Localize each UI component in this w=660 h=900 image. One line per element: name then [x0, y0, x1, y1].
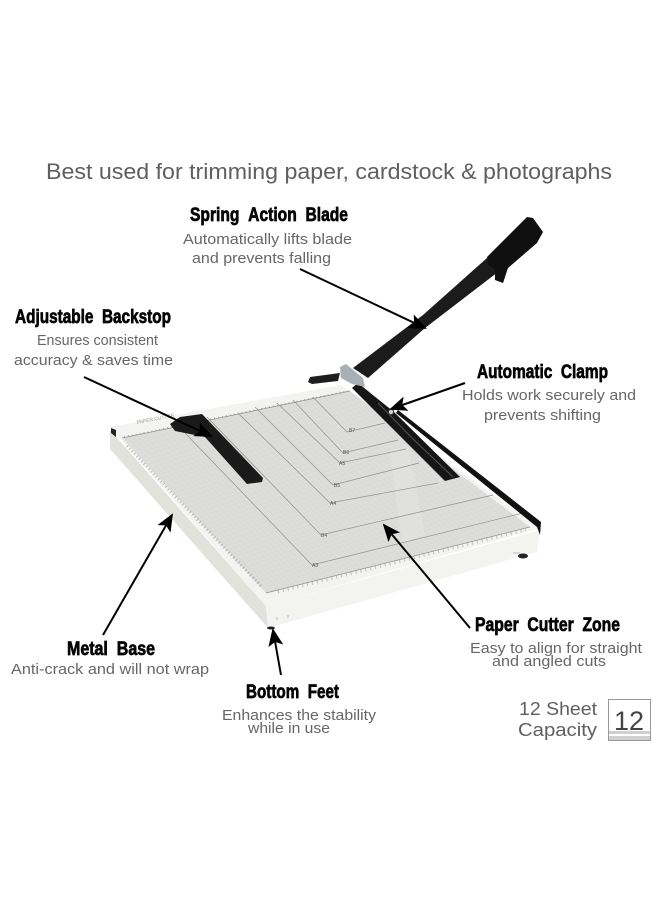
- soft light band on surface: [390, 446, 425, 543]
- description: Holds work securely and: [462, 387, 636, 404]
- front foot: [267, 626, 275, 630]
- right edge blade: [396, 410, 541, 535]
- description: Enhances the stability: [222, 707, 377, 724]
- callout: paper cutter zone: [384, 525, 643, 670]
- top ruler: [124, 391, 348, 437]
- arrow: [384, 525, 470, 628]
- cutter handle: [353, 217, 543, 378]
- arrow: [103, 515, 172, 635]
- ruler left: [127, 446, 262, 587]
- arrow: [391, 383, 465, 409]
- heading: Adjustable Backstop: [15, 307, 171, 328]
- icon: 12 sheet stack: [608, 700, 650, 740]
- arrow: [273, 630, 281, 675]
- description: Automatically lifts blade: [183, 231, 352, 248]
- sheet capacity label: 12 Sheet: [519, 698, 597, 719]
- paper size labels: A3: [312, 563, 318, 569]
- callout: bottom feet: [222, 630, 377, 737]
- arrow: [300, 269, 425, 328]
- grey cutting surface: [122, 391, 530, 593]
- arrow: [84, 377, 211, 436]
- heading: Bottom Feet: [246, 682, 340, 703]
- description: Anti-crack and will not wrap: [11, 661, 209, 678]
- paper size labels: B5: [334, 483, 340, 489]
- description: while in use: [247, 720, 330, 737]
- metal base top: [110, 385, 540, 606]
- paper size labels: A5: [339, 461, 345, 467]
- icon: 12 sheet stack: 12: [614, 706, 644, 736]
- black corner tab: [111, 428, 116, 437]
- title: Best used for trimming paper, cardstock & photographs: [46, 159, 612, 184]
- paper size labels: [312, 428, 355, 569]
- adjustable backstop: [170, 414, 263, 484]
- rear foot: [518, 554, 528, 558]
- paper size labels: B4: [321, 533, 327, 539]
- description: prevents shifting: [484, 407, 601, 424]
- ruler bottom: [278, 530, 526, 592]
- rear clamp bracket: [308, 373, 340, 384]
- cutting clamp bar: [352, 383, 460, 481]
- callout: spring action blade: [183, 205, 425, 328]
- metal base front: [266, 530, 540, 628]
- heading: Automatic Clamp: [477, 362, 608, 383]
- callout: automatic clamp: [391, 362, 636, 424]
- paper cutter product image: [110, 217, 543, 630]
- silver pivot bracket: [340, 364, 365, 387]
- heading: Metal Base: [67, 639, 155, 660]
- description: and prevents falling: [192, 250, 331, 267]
- callout: metal base: [11, 515, 209, 678]
- sheet capacity label: Capacity: [518, 719, 598, 740]
- heading: Spring Action Blade: [190, 205, 348, 226]
- paper size guide lines: [122, 391, 530, 593]
- brand label: PAPER CUTTER: [136, 413, 175, 426]
- description: Easy to align for straight: [470, 640, 643, 657]
- description: accuracy & saves time: [14, 352, 173, 369]
- paper size labels: A4: [330, 501, 336, 507]
- description: and angled cuts: [492, 653, 606, 670]
- description: Ensures consistent: [37, 332, 159, 349]
- callout: adjustable backstop: [14, 307, 211, 436]
- pivot screw: [388, 409, 394, 415]
- heading: Paper Cutter Zone: [475, 615, 620, 636]
- paper size labels: B7: [349, 428, 355, 434]
- paper size labels: B6: [343, 450, 349, 456]
- metal base side: [110, 430, 268, 628]
- foot marks: [277, 553, 520, 620]
